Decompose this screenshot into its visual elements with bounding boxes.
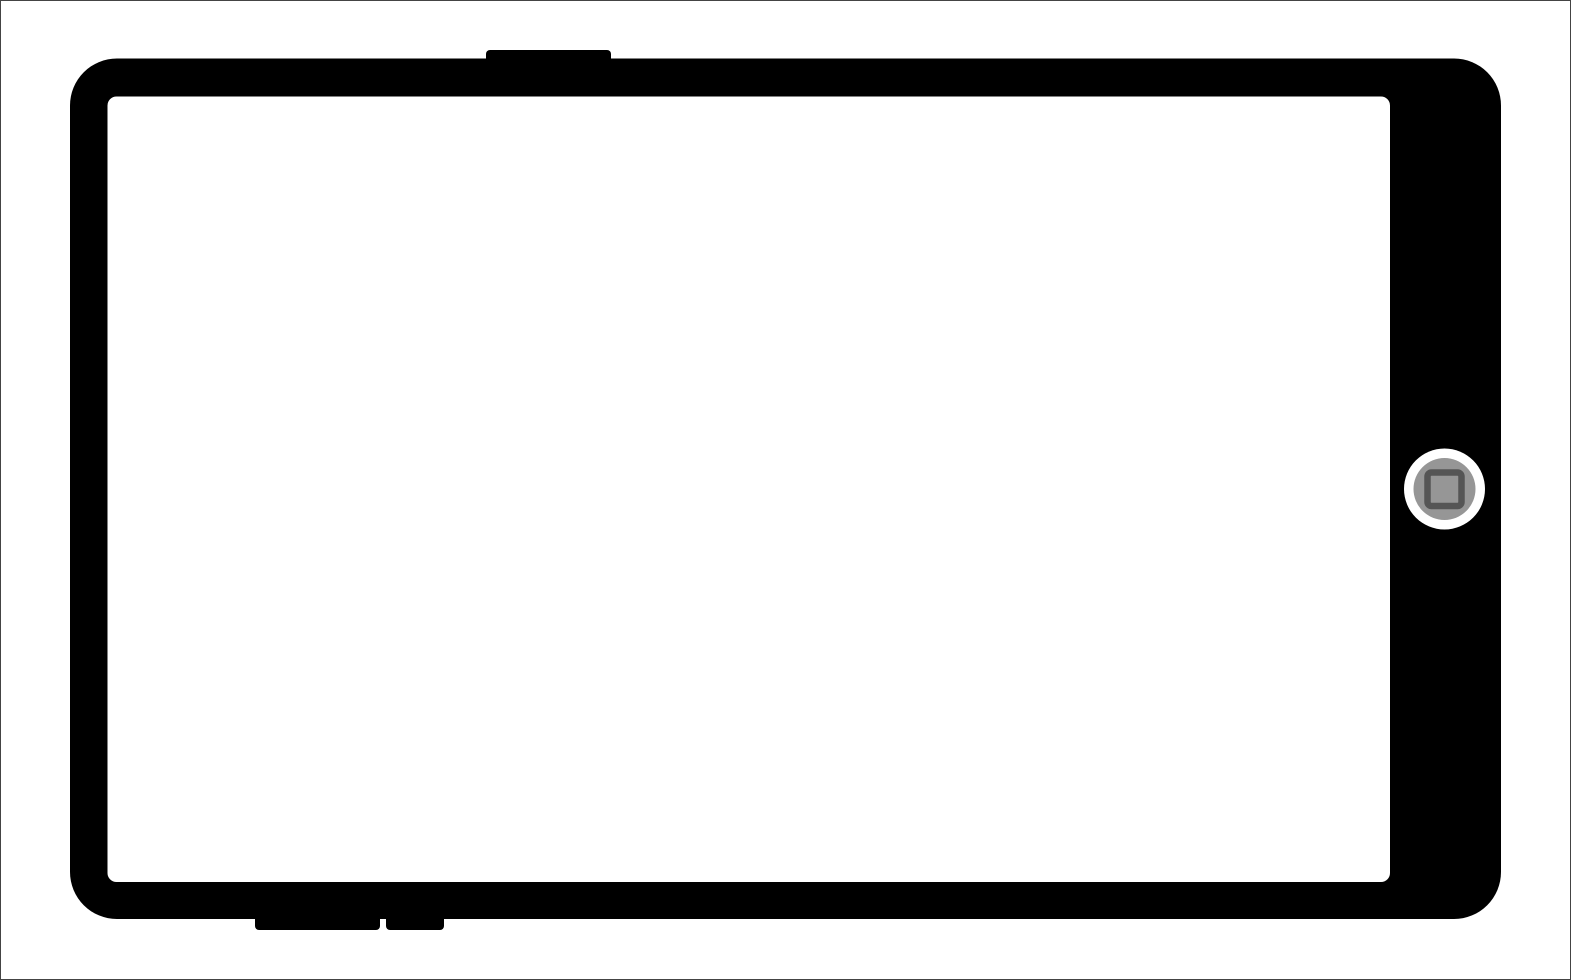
- home button grey disc: [1414, 458, 1476, 520]
- top side button: [486, 50, 611, 80]
- home button square icon: [1428, 472, 1462, 506]
- home button white ring: [1404, 448, 1485, 530]
- bottom side button left: [255, 900, 380, 930]
- bottom side button right: [386, 900, 444, 930]
- tablet body: [70, 58, 1501, 919]
- home button: [1404, 448, 1485, 530]
- screen: [108, 96, 1390, 882]
